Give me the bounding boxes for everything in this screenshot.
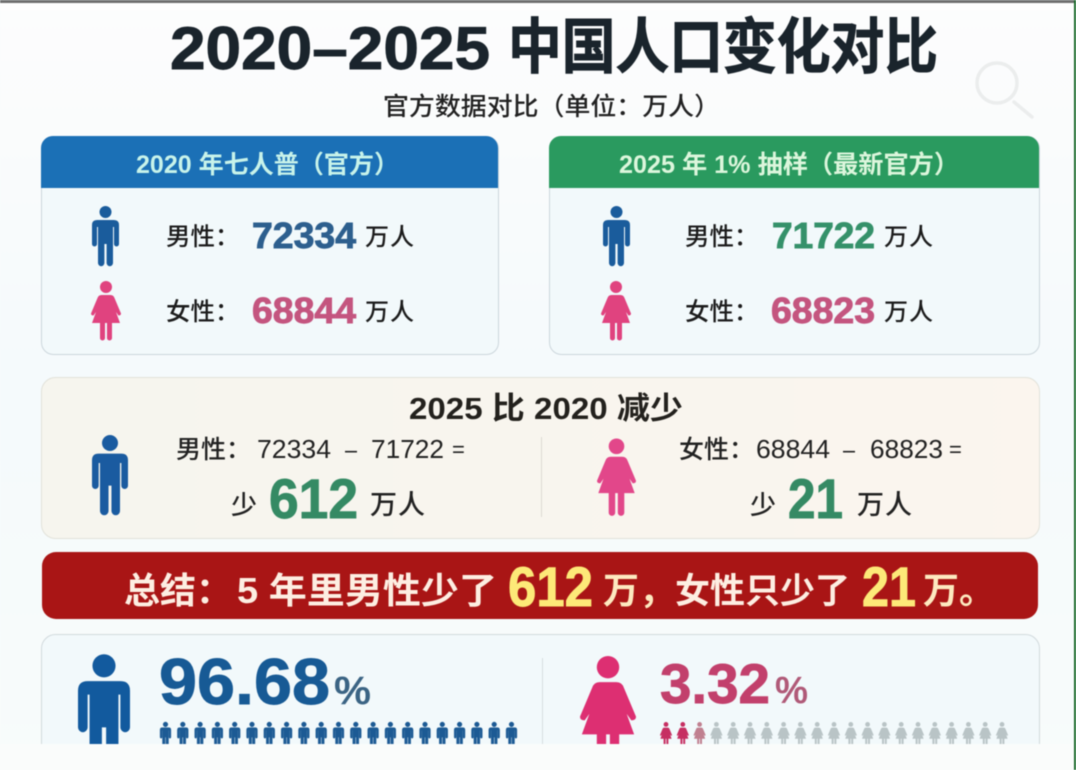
female row 2020 — [166, 290, 414, 331]
icon: female 2020 — [91, 281, 121, 340]
heading: decrease: 2025 比 2020 减少 — [409, 391, 683, 426]
icon: large female — [580, 656, 636, 767]
female formula — [679, 434, 962, 464]
male row 2020: 男性： — [166, 223, 240, 251]
panel header: 2020 — [41, 136, 498, 188]
male formula: 71722 — [371, 434, 444, 464]
male formula: 男性： — [176, 436, 251, 464]
female percentage: 3.32 — [660, 652, 770, 715]
male row 2020 — [166, 215, 414, 256]
female row 2020: 68844 — [252, 290, 356, 331]
male row 2020: 万人 — [365, 224, 414, 251]
panel: decrease comparison — [42, 378, 1040, 538]
female pictogram row — [660, 722, 1008, 746]
male row 2025 — [685, 215, 933, 256]
female result: 万人 — [857, 490, 912, 520]
female formula: 女性： — [679, 436, 754, 464]
panel: share statistics — [42, 634, 1040, 770]
panel: 2025 sample — [549, 136, 1040, 354]
panel header: 2025: 2025 年 1% 抽样（最新官方） — [619, 150, 959, 179]
female row 2025: 女性： — [685, 298, 758, 326]
banner: summary: 万。 — [923, 570, 995, 611]
icon: female decrease — [597, 438, 636, 516]
female row 2025: 万人 — [884, 299, 933, 326]
icon: male 2020 — [92, 206, 119, 266]
title: 2020–2025 — [170, 15, 490, 82]
banner: summary: 612 — [508, 555, 593, 618]
male percentage: % — [334, 669, 371, 713]
icon: magnifier watermark — [977, 63, 1032, 117]
icon: large male — [78, 654, 130, 770]
title: 中国人口变化对比 — [508, 14, 938, 81]
female formula: = — [949, 437, 962, 462]
icon: male 2025 — [603, 206, 630, 266]
female formula: – — [843, 437, 856, 464]
female result — [750, 467, 912, 530]
male result: 612 — [269, 467, 358, 530]
male row 2025: 万人 — [884, 224, 933, 251]
female formula: 68844 — [756, 434, 830, 464]
female row 2025 — [685, 290, 933, 331]
banner: summary: 21 — [862, 555, 916, 618]
male formula: 72334 — [257, 434, 331, 464]
male row 2020: 72334 — [252, 215, 356, 256]
male percentage: 96.68 — [159, 645, 330, 718]
male formula: – — [345, 437, 358, 464]
male formula: = — [452, 437, 465, 462]
female row 2020: 女性： — [166, 298, 240, 326]
female row 2020: 万人 — [365, 299, 414, 326]
subtitle: 官方数据对比（单位：万人） — [383, 93, 720, 121]
icon: male decrease — [92, 435, 128, 515]
banner: summary: 女性只少了 — [675, 572, 850, 611]
female result: 21 — [788, 467, 843, 530]
female percentage: % — [775, 670, 808, 712]
male result — [231, 467, 425, 530]
title — [170, 14, 938, 82]
panel header: 2020: 2020 年七人普（官方） — [136, 150, 399, 179]
banner: summary: 万， — [603, 570, 675, 611]
male row 2025: 男性： — [685, 223, 758, 251]
banner: summary: 5 年里男性少了 — [237, 570, 497, 611]
panel header: 2025 — [549, 136, 1039, 188]
male pictogram row — [160, 722, 517, 746]
panel: 2020 census — [41, 136, 498, 354]
female formula: 68823 — [870, 434, 943, 464]
male result: 万人 — [370, 490, 425, 520]
female row 2025: 68823 — [771, 290, 875, 331]
male formula — [176, 434, 465, 464]
banner: summary — [42, 552, 1038, 619]
male result: 少 — [231, 490, 257, 520]
female result: 少 — [750, 490, 776, 520]
icon: female 2025 — [601, 281, 631, 340]
banner: summary: 总结： — [124, 570, 232, 611]
male row 2025: 71722 — [772, 215, 875, 256]
